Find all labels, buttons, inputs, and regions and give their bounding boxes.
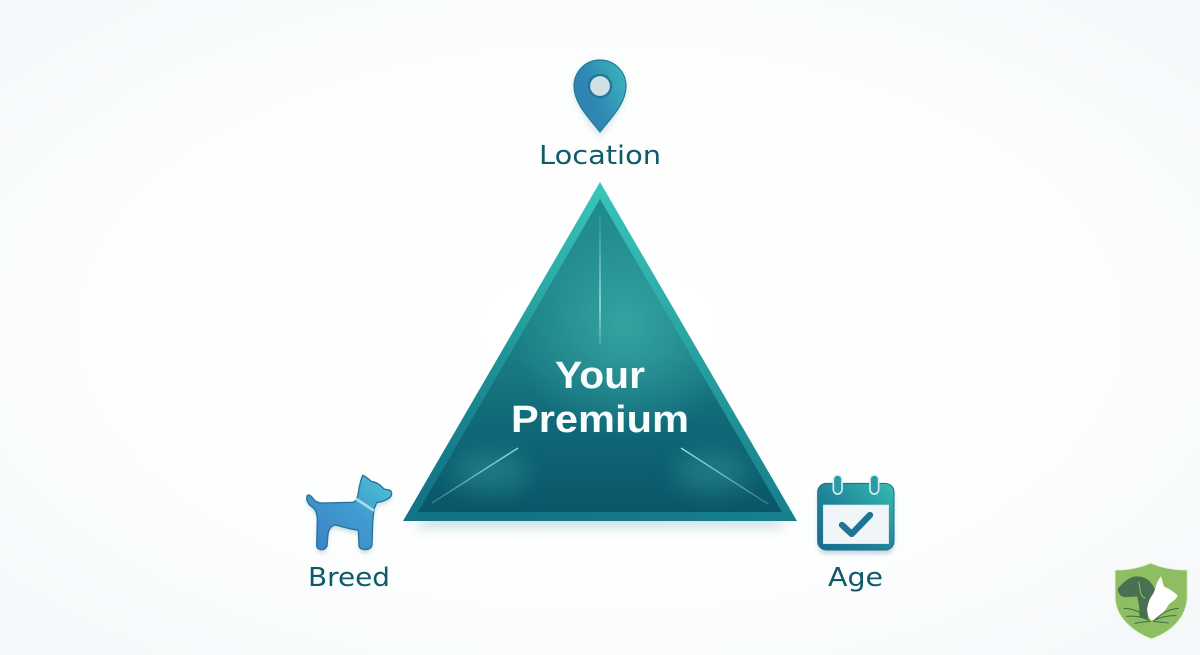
icon: location pin — [574, 60, 626, 137]
triangle inner face — [418, 199, 782, 512]
grass — [1124, 608, 1178, 623]
dog silhouette — [1118, 576, 1156, 620]
triangle text: Your — [555, 355, 645, 397]
check mark — [842, 515, 870, 534]
cat silhouette — [1147, 576, 1178, 621]
triangle text: Premium — [511, 399, 689, 441]
icon: calendar — [818, 475, 894, 554]
triangle outer frame — [403, 182, 797, 521]
label: location: Location — [539, 141, 661, 171]
dog ear — [1139, 582, 1145, 598]
logo: pet shield — [1115, 563, 1187, 639]
label: breed: Breed — [308, 563, 390, 593]
icon: dog — [307, 475, 392, 553]
triangle: your premium — [403, 182, 797, 528]
label: age: Age — [828, 563, 883, 593]
dog collar — [356, 499, 374, 511]
highlight rays — [432, 215, 768, 504]
calendar page — [823, 505, 889, 544]
triangle text — [511, 355, 689, 441]
calendar rings — [833, 475, 879, 494]
